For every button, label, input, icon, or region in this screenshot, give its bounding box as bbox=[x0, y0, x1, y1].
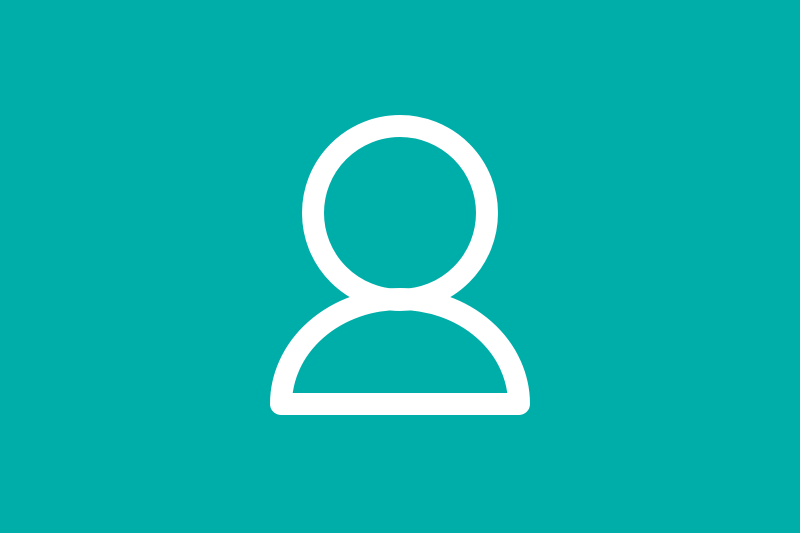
icon: person bbox=[281, 126, 519, 404]
icon: head bbox=[313, 126, 487, 300]
icon: body bbox=[281, 299, 519, 404]
